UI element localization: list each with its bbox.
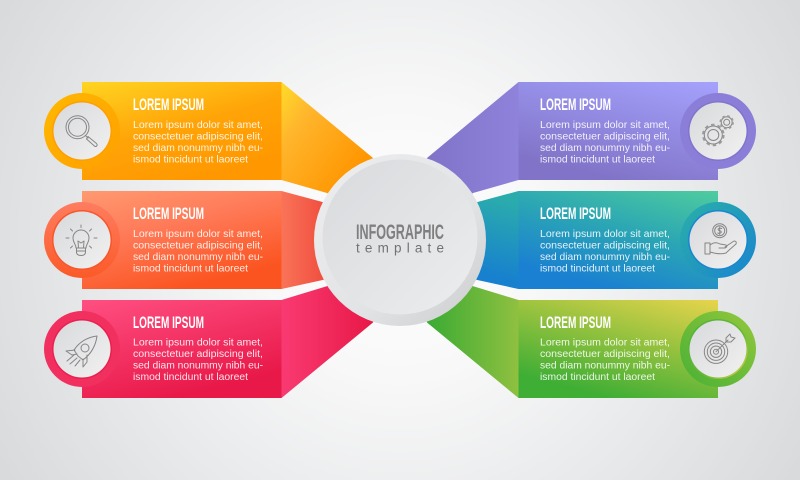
pink body text: sed diam nonummy nibh eu- xyxy=(133,360,263,372)
teal connector wedge xyxy=(400,191,518,289)
panel: orange step xyxy=(44,82,400,240)
violet body text: ismod tincidunt ut laoreet xyxy=(540,154,655,166)
orange panel body xyxy=(82,82,282,180)
green body text: ismod tincidunt ut laoreet xyxy=(540,372,655,383)
coral body text: sed diam nonummy nibh eu- xyxy=(133,252,263,263)
icon badge: rocket xyxy=(44,311,120,387)
green body text xyxy=(540,338,670,383)
teal heading: LOREM IPSUM xyxy=(540,204,611,223)
orange body text: Lorem ipsum dolor sit amet, xyxy=(133,120,263,131)
teal body text: sed diam nonummy nibh eu- xyxy=(540,252,670,263)
icon badge: gears xyxy=(680,93,756,169)
icon badge: light bulb xyxy=(44,202,120,278)
icon badge: magnifier xyxy=(44,93,120,169)
violet panel body xyxy=(518,82,718,180)
orange body text: sed diam nonummy nibh eu- xyxy=(133,143,263,154)
green heading: LOREM IPSUM xyxy=(540,313,611,332)
pink body text: consectetuer adipiscing elit, xyxy=(133,349,263,360)
panel: violet step xyxy=(400,82,756,240)
coral body text: consectetuer adipiscing elit, xyxy=(133,240,263,252)
panel: green step xyxy=(400,240,756,398)
teal body text xyxy=(540,229,670,274)
green connector wedge xyxy=(400,240,518,398)
coral body text: ismod tincidunt ut laoreet xyxy=(133,264,248,274)
coral body text xyxy=(133,229,263,274)
teal body text: consectetuer adipiscing elit, xyxy=(540,240,670,252)
orange connector wedge xyxy=(282,82,400,240)
orange heading: LOREM IPSUM xyxy=(133,95,204,114)
green panel body xyxy=(518,300,718,398)
coral heading: LOREM IPSUM xyxy=(133,204,204,223)
pink heading: LOREM IPSUM xyxy=(133,313,204,332)
violet body text xyxy=(540,120,670,166)
green body text: sed diam nonummy nibh eu- xyxy=(540,360,670,372)
orange body text xyxy=(133,120,263,166)
pink connector wedge xyxy=(282,240,400,398)
panel: pink step xyxy=(44,240,400,398)
panel: coral step xyxy=(44,191,400,289)
violet body text: sed diam nonummy nibh eu- xyxy=(540,143,670,154)
coral panel body xyxy=(82,191,282,289)
green body text: Lorem ipsum dolor sit amet, xyxy=(540,338,670,348)
green body text: consectetuer adipiscing elit, xyxy=(540,349,670,360)
coral connector wedge xyxy=(282,191,400,289)
teal body text: Lorem ipsum dolor sit amet, xyxy=(540,229,670,240)
centre circle xyxy=(314,154,486,326)
orange body text: consectetuer adipiscing elit, xyxy=(133,132,263,142)
centre subtitle: template xyxy=(356,240,444,256)
pink panel body xyxy=(82,300,282,398)
panel: teal step xyxy=(400,191,756,289)
coral body text: Lorem ipsum dolor sit amet, xyxy=(133,229,263,240)
pink body text: ismod tincidunt ut laoreet xyxy=(133,372,248,383)
teal body text: ismod tincidunt ut laoreet xyxy=(540,264,655,274)
violet heading: LOREM IPSUM xyxy=(540,95,611,114)
orange body text: ismod tincidunt ut laoreet xyxy=(133,154,248,166)
icon badge: hand holding coin xyxy=(680,202,756,278)
violet body text: Lorem ipsum dolor sit amet, xyxy=(540,120,670,131)
violet body text: consectetuer adipiscing elit, xyxy=(540,132,670,142)
violet connector wedge xyxy=(400,82,518,240)
pink body text: Lorem ipsum dolor sit amet, xyxy=(133,338,263,348)
centre title: INFOGRAPHIC xyxy=(356,221,444,244)
icon badge: target with dart xyxy=(680,311,756,387)
teal panel body xyxy=(518,191,718,289)
pink body text xyxy=(133,338,263,383)
